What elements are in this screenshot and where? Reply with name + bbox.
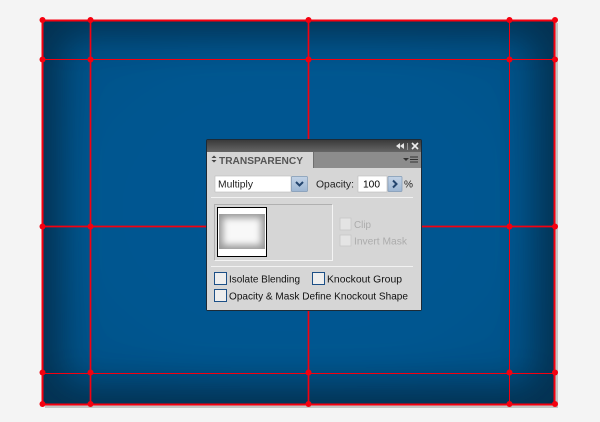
knockout group option	[312, 272, 402, 286]
invert mask option: Invert Mask	[354, 236, 408, 248]
clip option	[340, 218, 371, 231]
tab strip: TRANSPARENCY	[219, 156, 303, 167]
panel title bar	[207, 140, 421, 152]
panel: transparency	[206, 139, 422, 311]
knockout group option: Knockout Group	[327, 274, 402, 286]
opacity field: 100	[363, 180, 380, 190]
mesh anchor points	[40, 17, 558, 407]
mesh grid lines	[42, 20, 555, 405]
clip option: Clip	[354, 220, 371, 231]
blend mode dropdown: Multiply	[218, 180, 253, 190]
blue vignette background	[42, 20, 558, 408]
mask thumbnail	[218, 208, 266, 256]
tab strip	[207, 152, 421, 169]
mask preview area	[214, 204, 332, 260]
isolate blending option: Isolate Blending	[229, 274, 300, 286]
opacity field	[316, 176, 413, 192]
opacity and mask option: Opacity & Mask Define Knockout Shape	[229, 292, 408, 302]
blend mode dropdown	[215, 176, 308, 192]
invert mask option	[340, 235, 408, 248]
opacity field: Opacity:	[316, 180, 354, 190]
opacity field: %	[404, 180, 413, 190]
